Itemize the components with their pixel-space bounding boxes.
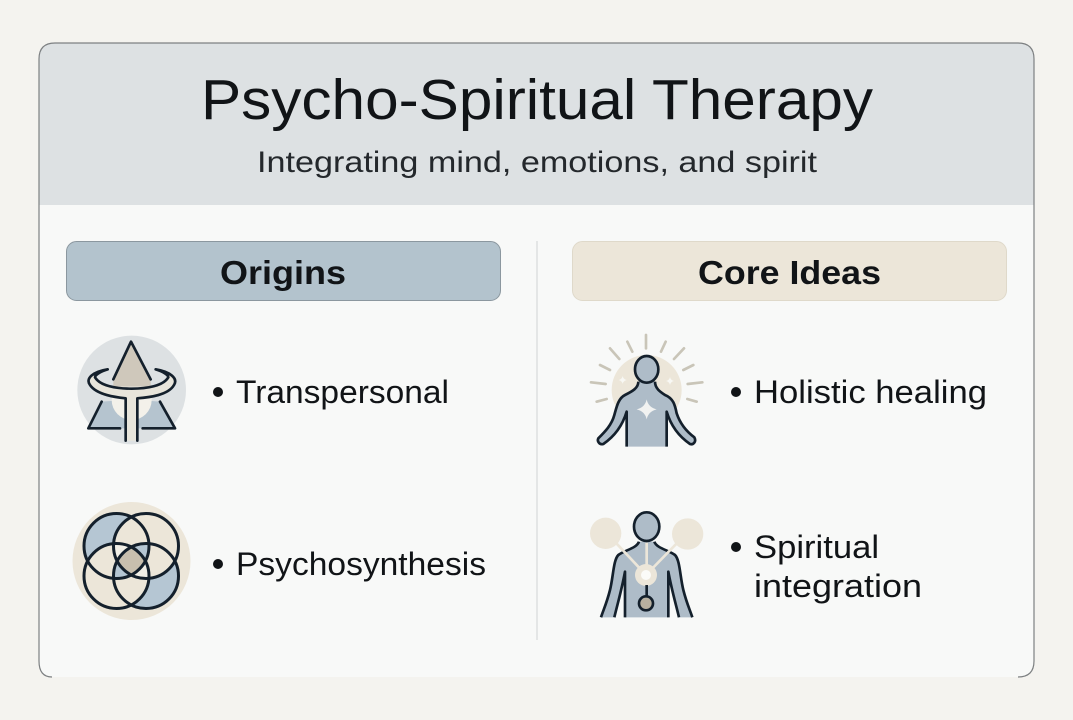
text: Holistic healing: Holistic healing: [754, 374, 987, 410]
icon: psychosynthesis overlapping circles: [72, 502, 190, 620]
heading: Core Ideas: [572, 242, 1006, 300]
subtitle: Integrating mind, emotions, and spirit: [257, 146, 818, 179]
text: Spiritual integration: integration: [754, 568, 922, 604]
text: Psychosynthesis: Psychosynthesis: [236, 546, 486, 582]
icon: spiritual integration figure: [590, 512, 703, 617]
icon: holistic healing figure: [591, 335, 702, 447]
divider: [536, 241, 538, 640]
heading: Core Ideas: Core Ideas: [698, 254, 881, 291]
title: Psycho-Spiritual Therapy: [201, 68, 874, 132]
text: Spiritual integration: Spiritual: [754, 529, 879, 565]
icon: transpersonal triangles and ring: [77, 336, 186, 444]
heading: Origins: [66, 242, 500, 300]
text: Spiritual integration: [731, 529, 922, 604]
text: Transpersonal: Transpersonal: [236, 374, 449, 410]
heading: Origins: Origins: [220, 254, 346, 291]
